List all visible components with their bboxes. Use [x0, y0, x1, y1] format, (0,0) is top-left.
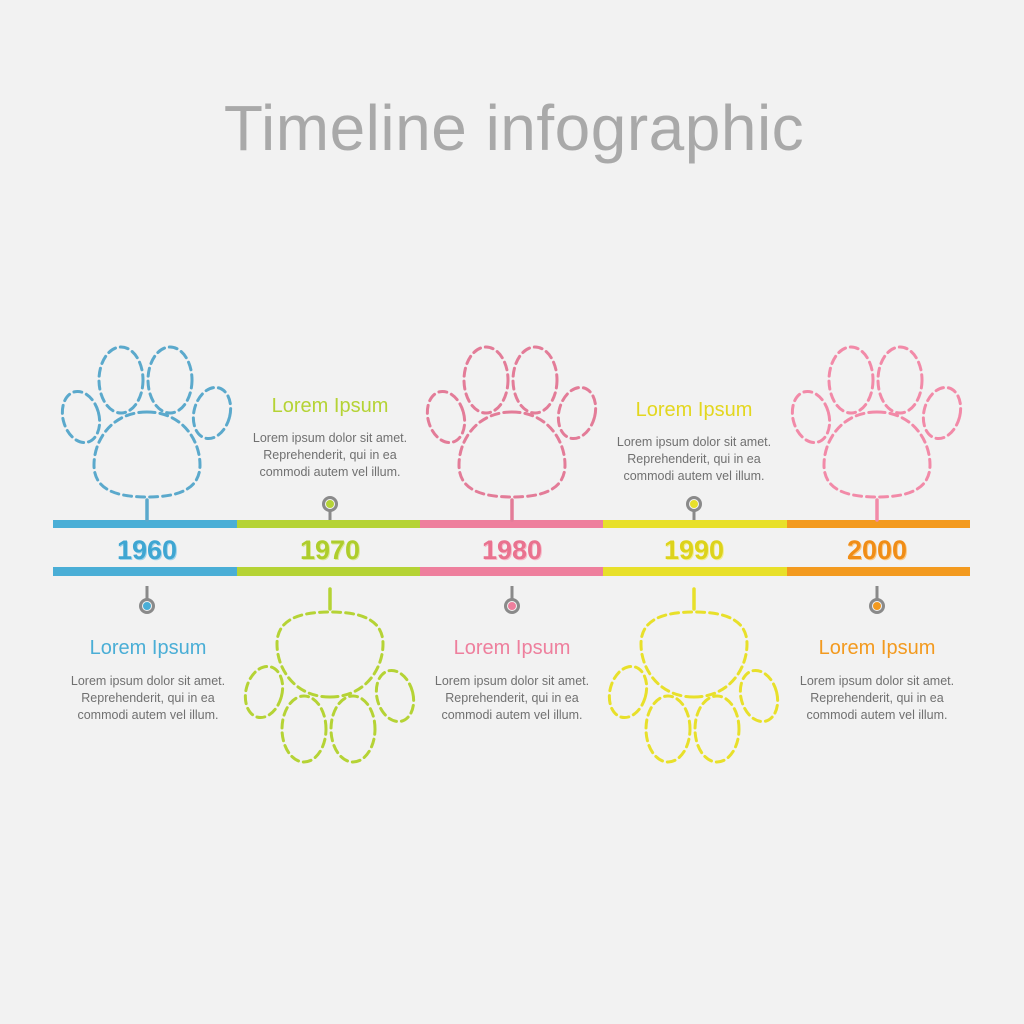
years: 1960: [117, 535, 177, 565]
text blocks: Lorem ipsum dolor sit amet.: [71, 674, 225, 688]
title: Timeline infographic: [224, 92, 804, 164]
text blocks: Reprehenderit, qui in ea: [81, 691, 215, 705]
text blocks: Reprehenderit, qui in ea: [627, 452, 761, 466]
text blocks: Reprehenderit, qui in ea: [263, 448, 397, 462]
text blocks: Lorem Ipsum: [819, 637, 935, 659]
text blocks: commodi autem vel illum.: [77, 708, 219, 722]
text blocks: Lorem Ipsum: [272, 395, 388, 417]
text blocks: Lorem ipsum dolor sit amet.: [617, 435, 771, 449]
text blocks: [71, 395, 954, 722]
text blocks: commodi autem vel illum.: [259, 465, 401, 479]
timeline bars: [53, 520, 970, 576]
years: 1990: [665, 536, 725, 566]
years: 1980: [483, 536, 543, 566]
text blocks: Reprehenderit, qui in ea: [810, 691, 944, 705]
paw 1970: [240, 589, 419, 762]
years: 1990: [664, 535, 724, 565]
text blocks: Lorem Ipsum: [636, 399, 752, 421]
text blocks: Lorem ipsum dolor sit amet.: [435, 674, 589, 688]
years: 2000: [847, 535, 907, 565]
text blocks: commodi autem vel illum.: [806, 708, 948, 722]
years: 2000: [848, 536, 908, 566]
paw 1980: [422, 347, 601, 520]
years: 1960: [118, 536, 178, 566]
text blocks: Lorem Ipsum: [454, 637, 570, 659]
text blocks: Lorem ipsum dolor sit amet.: [800, 674, 954, 688]
years: 1970: [300, 535, 360, 565]
text blocks: Lorem ipsum dolor sit amet.: [253, 431, 407, 445]
text blocks: commodi autem vel illum.: [441, 708, 583, 722]
paw 1960: [57, 347, 236, 520]
years: 1980: [482, 535, 542, 565]
years: 1970: [301, 536, 361, 566]
text blocks: Reprehenderit, qui in ea: [445, 691, 579, 705]
pins: [139, 496, 885, 614]
text blocks: commodi autem vel illum.: [623, 469, 765, 483]
paw 2000: [787, 347, 966, 520]
text blocks: Lorem Ipsum: [90, 637, 206, 659]
paw 1990: [604, 589, 783, 762]
years: [117, 535, 908, 566]
